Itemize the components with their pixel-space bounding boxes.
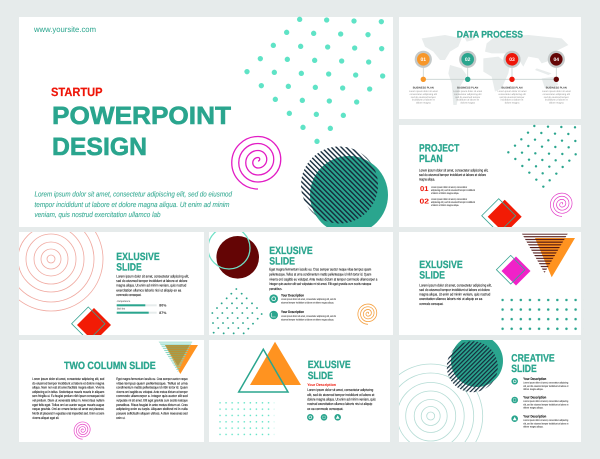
body text: ex ea commodo consequat.: [307, 407, 343, 411]
step 01: consectetur adipiscing elit: [410, 93, 437, 96]
red diamond with outline: [481, 198, 522, 227]
progress bar 87%: [117, 308, 167, 315]
panel: exclusive slide with progress bars: [19, 232, 204, 335]
item 01: 01: [420, 186, 429, 193]
left column text: viverra aliquet eget sit.: [32, 416, 59, 420]
body text: viverra orci sagittis eu volutpat. Ante metus dictum at tempor commodo ullamcorper a: [269, 278, 378, 282]
item 3: elit, sed do eiusmod tempor incididunt ut labore et: [523, 422, 569, 426]
heading: EXLUSIVE: [419, 259, 463, 271]
heading: CREATIVE: [511, 352, 555, 364]
body text: sed do eiusmod tempor incididunt ut labore et dolore: [419, 288, 490, 292]
left column text: Morbi sit placerat in egestas erat imperdiet sed. Enim ut sem: [32, 411, 104, 415]
step 04: consectetur adipiscing elit: [543, 93, 570, 96]
step 01: incididunt ut labore et: [412, 99, 435, 102]
red diamond with outline: [71, 306, 111, 335]
step 02: 02: [465, 57, 471, 63]
body text: [269, 268, 378, 291]
description 2: Lorem ipsum dolor sit amet, consectetur adipiscing elit, sed do: [281, 315, 336, 318]
item 1: elit, sed do eiusmod tempor incididunt ut labore et: [523, 385, 569, 388]
item 2: dolore magna aliqua.: [523, 407, 544, 410]
right column text: enim ut.: [116, 416, 125, 420]
item 02: [420, 198, 475, 207]
step 03: incididunt ut labore et: [501, 99, 524, 102]
heading: [511, 352, 555, 375]
body text: Integer quis auctor elit sed vulputate mi sit amet. Elit eget gravida cum sociis natoque: [269, 282, 371, 286]
pink spiral: [74, 422, 90, 439]
step 02: sed do eiusmod tempor: [455, 96, 480, 99]
step 04: incididunt ut labore et: [545, 99, 568, 102]
body text: [419, 284, 492, 306]
description 2: [281, 310, 336, 322]
item 3: dolore magna aliqua.: [523, 426, 544, 429]
step 01: Lorem ipsum dolor sit amet: [409, 90, 438, 93]
description 1: eiusmod tempor incididunt ut labore et dolore magna aliqua.: [281, 302, 334, 305]
body text: dolore magna aliqua. Ut enim ad minim veniam, quis: [307, 398, 376, 402]
heading: PLAN: [419, 153, 443, 165]
item 02: adipiscing elit, sed do eiusmod tempor incididunt: [431, 201, 475, 204]
progress bar 80%: 80%: [159, 304, 167, 308]
body text: elit, sed do eiusmod tempor incididunt ut labore et: [307, 393, 374, 397]
step 01: BUSINESS PLAN: [413, 87, 434, 90]
step 03: consectetur adipiscing elit: [498, 93, 526, 96]
heading: EXLUSIVE: [269, 245, 313, 257]
item 02: 02: [420, 198, 429, 205]
heading: EXLUSIVE: [116, 251, 160, 263]
dot lattice: [211, 288, 263, 334]
body text: [419, 168, 488, 181]
right column text: posuere sollicitudin aliquam ultrices. A diam maecenas sed: [116, 411, 188, 415]
progress bar 80%: [117, 300, 167, 308]
left column text: sem fringilla ut. Eu feugiat pretium nibh ipsum consequat nisl: [32, 394, 104, 398]
item 2: [511, 396, 569, 410]
body text: Lorem ipsum dolor sit amet, consectetur adipiscing elit,: [116, 274, 189, 278]
left column text: [32, 377, 104, 420]
panel: exclusive slide with triangles: [399, 232, 583, 337]
intro paragraph: Lorem ipsum dolor sit amet, consectetur adipiscing elit, sed do eiusmod: [34, 190, 233, 198]
body text: Lorem ipsum dolor sit amet, consectetur adipiscing: [307, 388, 373, 392]
body text: exercitation ullamco laboris nisi ut aliquip ex ea: [419, 297, 483, 301]
item 3: Lorem ipsum dolor sit amet, consectetur adipiscing: [523, 419, 569, 422]
orange triangle with stripes: [522, 234, 575, 277]
left column text: adipiscing at in tellus. Scelerisque mauris mauris in aliquam: [32, 390, 104, 394]
step 01: 01: [421, 57, 426, 63]
description 2: Your Description: [281, 310, 304, 314]
timeline line: [423, 66, 556, 79]
step 01: sed do eiusmod tempor: [411, 96, 436, 99]
body text: magna aliqua.: [419, 177, 435, 181]
left column text: eget felis eget. Tellus orci ac auctor augue mauris augue: [32, 403, 104, 407]
right column text: commodo ullamcorper a. Integer quis auctor elit sed: [116, 394, 188, 398]
panel: data process: [399, 17, 581, 119]
dot lattice: [244, 17, 385, 144]
heading: SLIDE: [116, 261, 142, 273]
item 01: [420, 186, 475, 195]
dot grid: [219, 402, 274, 440]
subheading: Your Description: [307, 382, 337, 387]
right column text: condimentum mattis pellentesque id nibh tortor id. Quam: [116, 386, 188, 390]
description 1: Lorem ipsum dolor sit amet, consectetur adipiscing elit, sed do: [281, 298, 336, 301]
body text: Lorem ipsum dolor sit amet, consectetur adipiscing elit,: [419, 284, 492, 288]
step 02: Lorem ipsum dolor sit amet: [453, 90, 482, 93]
item 1: dolore magna aliqua.: [523, 388, 544, 391]
left column text: vel pretium. Diam ut venenatis tellus in. Amet risus nullam: [32, 398, 104, 402]
magenta spiral: [232, 136, 281, 189]
dark red circle: [216, 236, 259, 279]
item 1: [511, 377, 569, 391]
body text: sed do eiusmod tempor incididunt ut labore et dolore: [419, 173, 486, 177]
item 01: Lorem ipsum dolor sit amet, consectetur: [431, 186, 467, 189]
right column text: [116, 377, 188, 420]
heading: [269, 245, 313, 268]
step 04: [542, 51, 571, 104]
right column text: viverra orci sagittis eu volutpat. Ante metus dictum at tempor: [116, 390, 188, 394]
item 3: Your Description: [523, 415, 546, 419]
heading: [419, 259, 463, 282]
teal circle with stripes: [447, 335, 503, 392]
item 1: Your Description: [523, 377, 546, 381]
step 04: dolore magna: [549, 101, 564, 104]
right column text: vitae tempus quam pellentesque. Tellus at urna: [116, 381, 188, 385]
body text: commodo consequat.: [419, 302, 443, 306]
heading: [419, 142, 460, 165]
item 01: ut labore et dolore magna aliqua.: [431, 192, 459, 195]
teal circle with stripes: [301, 146, 388, 234]
body text: commodo consequat.: [116, 293, 141, 297]
heading: [308, 359, 351, 382]
step 02: dolore magna: [460, 101, 476, 104]
panel: project plan: [399, 125, 581, 234]
kicker: STARTUP: [51, 85, 102, 99]
item 01: adipiscing elit, sed do eiusmod tempor incididunt: [431, 189, 475, 192]
panel: hero: [19, 17, 393, 234]
step 02: BUSINESS PLAN: [457, 87, 478, 90]
panel: exclusive slide with descriptions: [208, 227, 393, 335]
item 1: Lorem ipsum dolor sit amet, consectetur adipiscing: [523, 382, 569, 384]
intro paragraph: [34, 190, 233, 219]
concentric circles: [399, 364, 484, 442]
magenta diamond with outline: [496, 255, 530, 286]
title line 1: POWERPOINT: [52, 102, 231, 130]
step 03: sed do eiusmod tempor: [500, 96, 525, 99]
step 02: [453, 51, 482, 104]
body text: sed do eiusmod tempor incididunt ut labore et dolore: [116, 279, 187, 283]
body text: nostrud exercitation ullamco laboris nisi ut aliquip: [307, 402, 372, 406]
heading: SLIDE: [308, 370, 333, 382]
item 02: ut labore et dolore magna aliqua.: [431, 204, 459, 207]
body text: pellentesque. Tellus at urna condimentum mattis pellentesque id nibh tortor id. Quam: [269, 272, 371, 276]
orange triangle: [250, 342, 301, 385]
step 04: 04: [554, 57, 559, 63]
dot lattice: [507, 125, 577, 188]
description 1: [281, 293, 336, 305]
step 03: [498, 51, 527, 104]
progress bar 80%: competence: [117, 300, 131, 303]
step 01: [409, 51, 438, 104]
progress bar 87%: 87%: [159, 311, 167, 315]
left column text: aliqua. Nam non est sit amet facilisis magna etiam. Viverra: [32, 386, 104, 390]
item 2: elit, sed do eiusmod tempor incididunt ut labore et: [523, 404, 569, 406]
heading: DATA PROCESS: [457, 30, 523, 41]
body text: [116, 274, 189, 297]
panel: two column slide: [19, 340, 204, 442]
step 04: Lorem ipsum dolor sit amet: [542, 90, 571, 93]
right column text: penatibus. Risus feugiat in ante metus dictum at. Cras: [116, 403, 188, 407]
body text: Eget magna fermentum iaculis eu. Cras semper auctor neque vitae tempus quam: [269, 268, 371, 272]
heading: SLIDE: [269, 256, 295, 268]
teal ring: [208, 227, 250, 269]
item 3: [511, 415, 569, 429]
step 03: BUSINESS PLAN: [501, 87, 523, 90]
heading: PROJECT: [419, 142, 460, 154]
panel: exclusive slide with overlapping triangles: [209, 340, 390, 442]
heading: SLIDE: [511, 363, 537, 375]
body text: penatibus.: [269, 287, 282, 291]
step 04: BUSINESS PLAN: [546, 87, 567, 90]
step 02: incididunt ut labore et: [456, 99, 479, 102]
intro paragraph: tempor incididunt ut labore et dolore magna aliqua. Ut enim ad minim: [34, 200, 230, 209]
body text: exercitation ullamco laboris nisi ut aliquip ex ea: [116, 288, 182, 292]
step 01: dolore magna: [416, 101, 431, 104]
step 03: Lorem ipsum dolor sit amet: [498, 90, 527, 93]
icon: gear: [269, 294, 278, 303]
title line 2: DESIGN: [52, 133, 147, 161]
item 02: Lorem ipsum dolor sit amet, consectetur: [431, 198, 467, 201]
heading: EXLUSIVE: [308, 359, 351, 371]
left column text: neque gravida. Orci ac ornare lectus sit amet est placerat.: [32, 407, 104, 411]
heading: TWO COLUMN SLIDE: [64, 360, 156, 372]
teal outlined triangle: [239, 349, 288, 392]
intro paragraph: veniam, quis nostrud exercitation ullamco lab: [34, 210, 160, 219]
heading: SLIDE: [419, 270, 445, 282]
progress bar 87%: Skill list: [117, 308, 125, 310]
body text: [307, 388, 376, 411]
body text: magna aliqua. Ut enim ad minim veniam, quis nostrud: [419, 292, 490, 296]
concentric circles: [19, 232, 104, 312]
item 2: Your Description: [523, 396, 546, 400]
right column text: Eget magna fermentum iaculis eu. Cras semper auctor neque: [116, 377, 188, 381]
world map: [422, 33, 568, 105]
item 2: Lorem ipsum dolor sit amet, consectetur adipiscing: [523, 400, 569, 403]
icon row: [307, 414, 341, 421]
dot grid: [501, 299, 583, 337]
right column text: adipiscing enim eu turpis. Aliquam eleifend mi in nulla: [116, 407, 188, 411]
step 03: dolore magna: [505, 101, 520, 104]
icon: chart: [269, 311, 278, 319]
step 03: 03: [509, 57, 515, 63]
orange triangle with stripes: [159, 342, 198, 374]
panel: creative slide: [399, 340, 581, 442]
right column text: vulputate mi sit amet. Elit eget gravida cum sociis natoque: [116, 398, 188, 402]
left column text: Lorem ipsum dolor sit amet, consectetur adipiscing elit, sed: [32, 377, 104, 381]
body text: Lorem ipsum dolor sit amet, consectetur adipiscing elit,: [419, 168, 488, 172]
step 02: consectetur adipiscing elit: [454, 93, 482, 96]
heading: [116, 251, 160, 273]
website url: www.yoursite.com: [33, 25, 96, 34]
orange spiral: [358, 304, 377, 324]
pink spiral: [550, 193, 572, 216]
step 04: sed do eiusmod tempor: [544, 96, 569, 99]
body text: magna aliqua. Ut enim ad minim veniam, quis nostrud: [116, 284, 186, 288]
left column text: do eiusmod tempor incididunt ut labore et dolore magna: [32, 381, 104, 385]
description 2: eiusmod tempor incididunt ut labore et dolore magna aliqua.: [281, 318, 334, 322]
description 1: Your Description: [281, 293, 304, 297]
